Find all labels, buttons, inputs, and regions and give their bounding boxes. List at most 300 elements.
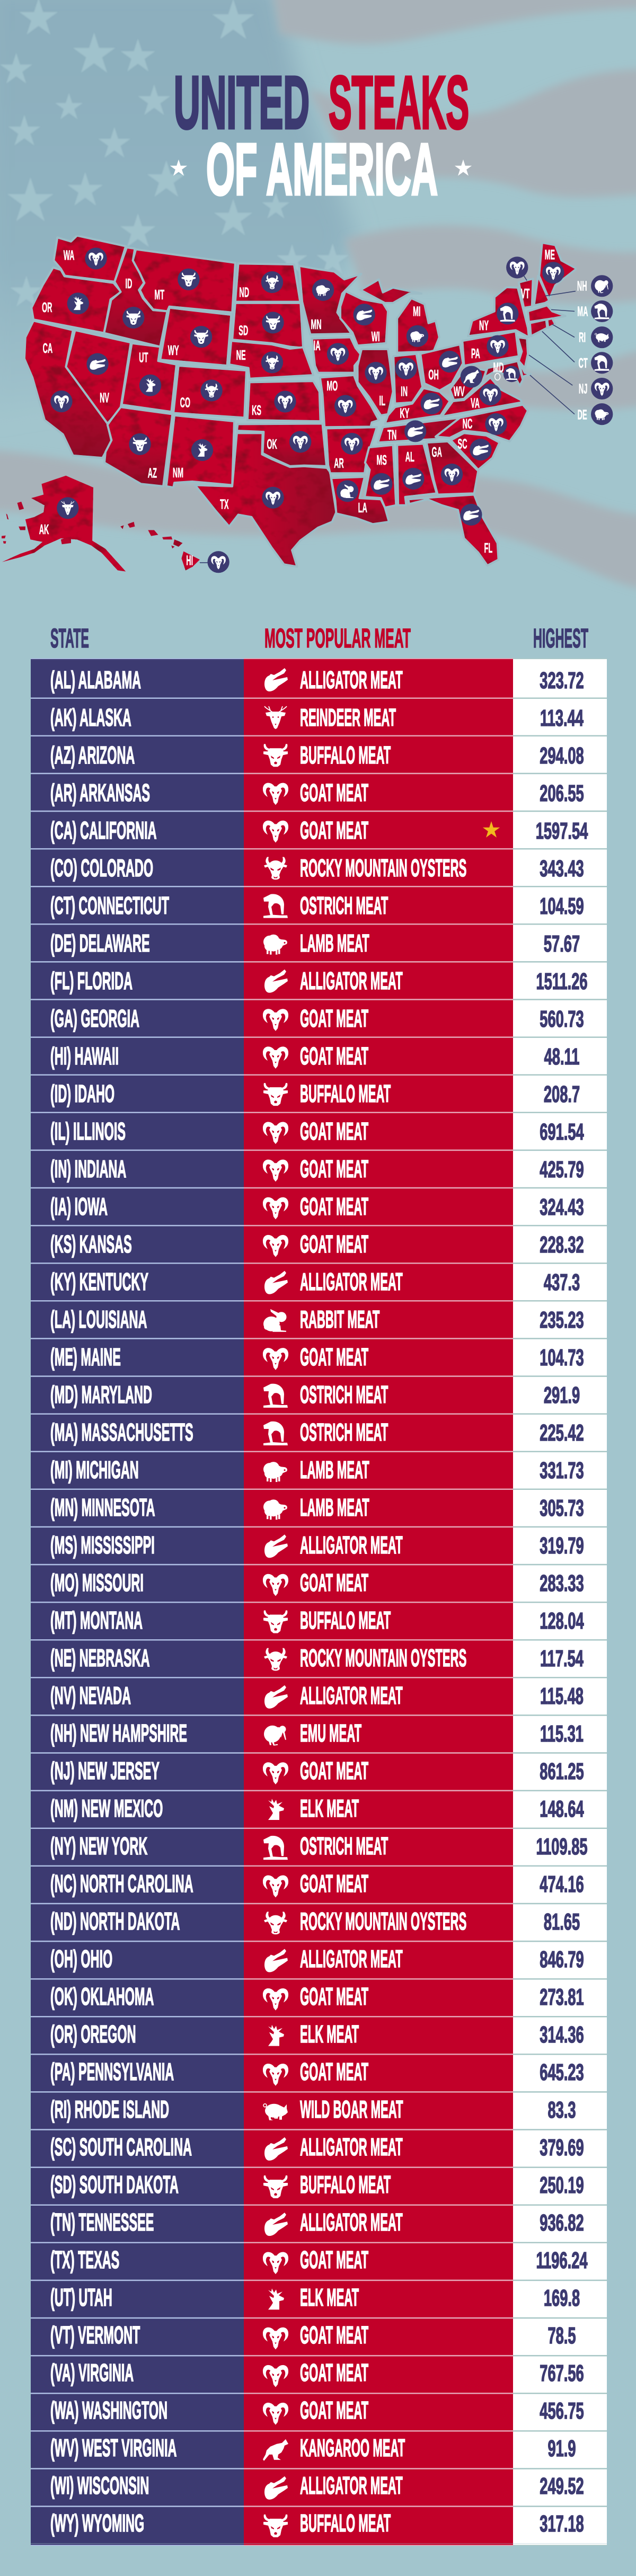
row: South Dakota: [31, 2166, 607, 2205]
icon: AL alligator: [402, 468, 425, 490]
state abbreviations on map: FL: [484, 540, 492, 556]
row: Indiana: 425.79: [540, 1156, 584, 1183]
row: North Carolina: 474.16: [540, 1871, 584, 1897]
state: NY: [468, 287, 529, 337]
Alaska and Hawaii islands: [2, 502, 182, 548]
row: Ohio: [31, 1941, 607, 1978]
row: Kansas: [31, 1225, 607, 1263]
row: Texas: (TX) TEXAS: [50, 2246, 119, 2273]
row: North Carolina: GOAT MEAT: [300, 1870, 368, 1897]
row: New York: (NY) NEW YORK: [50, 1832, 148, 1860]
icon: WI alligator: [354, 304, 375, 325]
state: NM: [166, 415, 234, 487]
icon: NV alligator: [86, 353, 109, 375]
row: Iowa: GOAT MEAT: [300, 1193, 368, 1220]
row: Delaware: 57.67: [544, 930, 580, 957]
row: Wisconsin: [31, 2468, 607, 2506]
state: NC: [436, 405, 528, 441]
row: Florida: (FL) FLORIDA: [50, 967, 132, 994]
state: CA: [24, 321, 111, 458]
eastern states: [299, 243, 577, 565]
state: IL: [358, 349, 393, 415]
icon: TX goat: [262, 487, 284, 509]
row: South Carolina: 379.69: [540, 2134, 584, 2161]
icon: MA ostrich: [591, 300, 613, 322]
state abbreviations on map: AR: [334, 456, 344, 471]
state abbreviations on map: DE: [578, 407, 587, 423]
row: Mississippi: [31, 1526, 607, 1564]
icon: PA goat: [487, 335, 509, 357]
icon: ND rocky mountain oysters: [261, 271, 283, 293]
row: Mississippi: 319.79: [540, 1532, 584, 1559]
row: Michigan: [31, 1451, 607, 1489]
row: Illinois: (IL) ILLINOIS: [50, 1117, 126, 1145]
row: Minnesota: LAMB MEAT: [300, 1494, 369, 1521]
row: New York: OSTRICH MEAT: [300, 1832, 388, 1860]
row: Colorado: 343.43: [540, 855, 584, 882]
row: Louisiana: [31, 1300, 607, 1338]
icon: highest-price star: [483, 821, 500, 838]
row: Ohio: (OH) OHIO: [50, 1945, 112, 1973]
row: Colorado: [31, 848, 607, 886]
icon: KY alligator: [421, 393, 443, 414]
row: Pennsylvania: (PA) PENNSYLVANIA: [50, 2058, 174, 2085]
row: Kentucky: 437.3: [544, 1269, 580, 1295]
row: Hawaii: [31, 1036, 607, 1074]
row: Massachusetts: OSTRICH MEAT: [300, 1418, 388, 1446]
state abbreviations on map: VA: [471, 396, 480, 411]
icon: title stars: [170, 159, 472, 176]
row: Illinois: [31, 1112, 607, 1150]
state abbreviations on map: NH: [577, 279, 587, 294]
state: AR: [326, 427, 377, 473]
row: Nevada: [31, 1677, 607, 1715]
state abbreviations on map: SD: [238, 323, 248, 339]
row: Minnesota: [31, 1489, 607, 1526]
state: MO: [320, 375, 379, 427]
state abbreviations on map: TX: [220, 496, 229, 512]
table bottom edge: [31, 2544, 607, 2546]
row: Delaware: LAMB MEAT: [300, 929, 369, 957]
row: Nevada: 115.48: [540, 1683, 584, 1709]
state: IN: [393, 354, 422, 404]
icon: MO goat: [334, 395, 356, 417]
state: VT: [519, 279, 533, 308]
icon: MD ostrich: [504, 366, 520, 382]
row: New York: 1109.85: [536, 1833, 588, 1860]
row: Oklahoma: (OK) OKLAHOMA: [50, 1983, 154, 2010]
row: New Mexico: (NM) NEW MEXICO: [50, 1795, 163, 1822]
icon: DE lamb: [591, 403, 613, 425]
map of the United States: [2, 236, 613, 573]
row: Michigan: 331.73: [540, 1457, 584, 1484]
row: West Virginia: 91.9: [547, 2435, 576, 2462]
row: Pennsylvania: [31, 2054, 607, 2091]
row: Mississippi: ALLIGATOR MEAT: [300, 1531, 403, 1559]
row: Rhode Island: (RI) RHODE ISLAND: [50, 2095, 169, 2123]
state: KY: [385, 388, 450, 424]
icon: AR goat: [341, 433, 363, 455]
state abbreviations on map: VT: [521, 286, 530, 301]
table top edge: [31, 658, 607, 661]
state abbreviations on map: IN: [401, 384, 408, 399]
state abbreviations on map: ID: [126, 276, 132, 291]
row: South Dakota: 250.19: [540, 2172, 584, 2198]
row: Rhode Island: [31, 2091, 607, 2129]
state: ME: [539, 243, 577, 299]
state abbreviations on map: NC: [463, 416, 472, 432]
icon: FL alligator: [460, 504, 482, 526]
row: Maryland: OSTRICH MEAT: [300, 1381, 388, 1408]
row: New Jersey: 861.25: [540, 1758, 584, 1784]
state: NE: [229, 341, 313, 379]
state: WY: [160, 308, 231, 366]
row: North Carolina: [31, 1866, 607, 1903]
icon: SC alligator: [470, 439, 492, 460]
state: FL: [408, 494, 499, 565]
row: California: 1597.54: [536, 818, 588, 844]
state: NH: [534, 276, 549, 305]
state: MN: [299, 266, 361, 334]
row: Kentucky: [31, 1263, 607, 1300]
row: Maine: 104.73: [540, 1344, 584, 1371]
row: Massachusetts: (MA) MASSACHUSETTS: [50, 1418, 193, 1446]
row: South Carolina: [31, 2129, 607, 2167]
icon: OK goat: [289, 431, 311, 452]
row: Nevada: (NV) NEVADA: [50, 1682, 131, 1709]
row: Rhode Island: WILD BOAR MEAT: [300, 2095, 403, 2123]
row: Arkansas: 206.55: [540, 780, 584, 806]
state: SC: [451, 433, 499, 470]
state: MA: [528, 305, 566, 322]
row: Delaware: (DE) DELAWARE: [50, 929, 150, 957]
row: Washington: 456.75: [540, 2397, 584, 2424]
state abbreviations on map: MO: [326, 378, 338, 394]
row: Indiana: GOAT MEAT: [300, 1155, 368, 1183]
icon: MT buffalo: [178, 269, 200, 290]
row: Montana: BUFFALO MEAT: [300, 1606, 391, 1634]
row: Maryland: (MD) MARYLAND: [50, 1381, 152, 1408]
row: Utah: ELK MEAT: [300, 2284, 359, 2311]
icon: NJ goat: [591, 378, 613, 399]
state abbreviations on map: WA: [64, 248, 75, 263]
row: Virginia: [31, 2355, 607, 2393]
row: Arkansas: (AR) ARKANSAS: [50, 779, 150, 806]
row: Oklahoma: GOAT MEAT: [300, 1983, 368, 2010]
row: North Dakota: 81.65: [544, 1908, 580, 1935]
table headings: [50, 623, 588, 653]
row: Connecticut: 104.59: [540, 893, 584, 919]
state: RI: [547, 318, 555, 328]
row: Missouri: 283.33: [540, 1570, 584, 1596]
state: MI upper peninsula: [360, 279, 421, 303]
row: Texas: GOAT MEAT: [300, 2246, 368, 2273]
state: GA: [427, 441, 478, 494]
row: Virginia: GOAT MEAT: [300, 2359, 368, 2386]
state abbreviations on map: RI: [579, 330, 586, 345]
row: Maine: GOAT MEAT: [300, 1343, 368, 1371]
icon: MN lamb: [312, 279, 334, 301]
row: Florida: [31, 961, 607, 999]
state: HI: [181, 552, 200, 570]
row: Oklahoma: 273.81: [540, 1984, 584, 2010]
row: Maryland: 291.9: [544, 1382, 580, 1408]
row: California: (CA) CALIFORNIA: [50, 816, 157, 844]
state: NV: [66, 330, 131, 424]
row: Delaware: [31, 923, 607, 961]
row: Nebraska: (NE) NEBRASKA: [50, 1644, 150, 1672]
row: New Hampshire: [31, 1715, 607, 1752]
row: Indiana: (IN) INDIANA: [50, 1155, 126, 1183]
row: Wyoming: [31, 2506, 607, 2543]
row: Alabama: 323.72: [540, 667, 584, 694]
state abbreviations on map: [39, 247, 588, 569]
row: Tennessee: [31, 2204, 607, 2242]
icon: LA rabbit: [337, 480, 358, 502]
row: New Hampshire: 115.31: [540, 1720, 584, 1747]
row: Alabama: [31, 660, 607, 698]
state abbreviations on map: OR: [42, 300, 52, 315]
row: Florida: ALLIGATOR MEAT: [300, 967, 403, 994]
state: MI lower peninsula: [397, 298, 439, 353]
state abbreviations on map: MT: [154, 287, 164, 303]
icon: NM elk: [191, 439, 213, 461]
row: Vermont: 78.5: [547, 2322, 576, 2349]
icon: WV kangaroo: [461, 366, 482, 388]
title line: United Steaks: UNITED: [174, 60, 310, 144]
row: Louisiana: (LA) LOUISIANA: [50, 1305, 147, 1333]
row: Nebraska: [31, 1639, 607, 1677]
icon: VT goat: [506, 256, 528, 278]
row: Maine: (ME) MAINE: [50, 1343, 121, 1371]
state: AK: [2, 476, 126, 572]
state: NJ: [518, 337, 528, 368]
row: New Hampshire: EMU MEAT: [300, 1719, 361, 1747]
row: Tennessee: (TN) TENNESSEE: [50, 2208, 154, 2236]
icon: MI lamb: [407, 325, 428, 347]
row: New Hampshire: (NH) NEW HAMPSHIRE: [50, 1719, 187, 1747]
row: Oregon: ELK MEAT: [300, 2020, 359, 2048]
row: Virginia: (VA) VIRGINIA: [50, 2359, 134, 2386]
state abbreviations on map: MD: [493, 360, 504, 376]
row: Massachusetts: 225.42: [540, 1419, 584, 1446]
row: North Dakota: [31, 1903, 607, 1941]
row: Texas: 1196.24: [536, 2247, 588, 2273]
state abbreviations on map: WV: [454, 384, 465, 399]
row: Tennessee: 936.82: [540, 2209, 584, 2236]
state abbreviations on map: NV: [100, 390, 109, 406]
state abbreviations on map: CT: [579, 356, 588, 371]
row: Connecticut: OSTRICH MEAT: [300, 892, 388, 919]
row: Wisconsin: 249.52: [540, 2473, 584, 2499]
state abbreviations on map: AK: [39, 522, 49, 537]
map states: [2, 236, 577, 572]
icon: NE rocky mountain oysters: [261, 351, 283, 373]
state abbreviations on map: NM: [173, 465, 183, 481]
state: MS: [365, 445, 396, 508]
icon: OH alligator: [439, 351, 461, 372]
row: South Dakota: (SD) SOUTH DAKOTA: [50, 2171, 179, 2198]
state abbreviations on map: LA: [358, 500, 367, 516]
row: Washington: GOAT MEAT: [300, 2396, 368, 2424]
row: Utah: 169.8: [544, 2285, 580, 2311]
row: Wisconsin: ALLIGATOR MEAT: [300, 2472, 403, 2499]
row: Arizona: [31, 735, 607, 773]
state: OK: [237, 424, 326, 466]
row: Texas: [31, 2242, 607, 2280]
row: Massachusetts: [31, 1413, 607, 1451]
state abbreviations on map: NE: [236, 348, 246, 363]
row: South Dakota: BUFFALO MEAT: [300, 2171, 391, 2198]
row: Connecticut: [31, 886, 607, 923]
state: TX: [195, 433, 336, 567]
row: Alaska: REINDEER MEAT: [300, 704, 396, 731]
state abbreviations on map: OH: [428, 367, 439, 383]
state abbreviations on map: IL: [379, 393, 385, 409]
text: STEAKS: [329, 60, 469, 144]
row: North Dakota: (ND) NORTH DAKOTA: [50, 1907, 180, 1935]
row: Vermont: (VT) VERMONT: [50, 2321, 140, 2349]
icon: UT elk: [139, 375, 161, 396]
row: Utah: (UT) UTAH: [50, 2284, 112, 2311]
row: Montana: 128.04: [540, 1607, 584, 1634]
row: Idaho: 208.7: [544, 1081, 580, 1107]
row: Wyoming: BUFFALO MEAT: [300, 2509, 391, 2537]
row: Missouri: (MO) MISSOURI: [50, 1569, 144, 1596]
state: OR: [31, 268, 121, 333]
row: North Dakota: ROCKY MOUNTAIN OYSTERS: [300, 1907, 466, 1935]
icon: NH emu: [591, 275, 613, 297]
map markers: [50, 247, 613, 573]
icon: KS goat: [274, 391, 296, 413]
row: Missouri: GOAT MEAT: [300, 1569, 368, 1596]
row: Arkansas: GOAT MEAT: [300, 779, 368, 806]
icon: NC goat: [485, 413, 507, 435]
row: Georgia: GOAT MEAT: [300, 1005, 368, 1032]
state: MD: [484, 361, 523, 386]
row: Maine: [31, 1338, 607, 1375]
row: West Virginia: [31, 2430, 607, 2468]
icon: HI goat: [207, 551, 229, 573]
row: Hawaii: GOAT MEAT: [300, 1042, 368, 1070]
icon: ME goat: [542, 262, 564, 283]
icon: VA goat: [480, 384, 501, 405]
state: WV: [450, 369, 487, 400]
row: Hawaii: 48.11: [544, 1043, 579, 1070]
row: Pennsylvania: 645.23: [540, 2059, 584, 2085]
icon: WA goat: [85, 247, 107, 269]
row: Colorado: (CO) COLORADO: [50, 854, 153, 882]
state abbreviations on map: ND: [239, 285, 249, 300]
icon: IL goat: [365, 362, 387, 384]
state: SD: [232, 303, 303, 348]
row: Utah: [31, 2280, 607, 2317]
row: Pennsylvania: GOAT MEAT: [300, 2058, 368, 2085]
state: TN: [378, 418, 460, 442]
row: West Virginia: (WV) WEST VIRGINIA: [50, 2434, 176, 2462]
row: Alabama: (AL) ALABAMA: [50, 666, 141, 694]
state: WA: [54, 236, 126, 282]
state: AL: [397, 444, 437, 505]
icon: CA goat: [50, 390, 73, 412]
row: Vermont: GOAT MEAT: [300, 2321, 368, 2349]
row: Colorado: ROCKY MOUNTAIN OYSTERS: [300, 854, 466, 882]
icon: MS alligator: [370, 473, 392, 495]
row: Rhode Island: 83.3: [547, 2097, 576, 2123]
icon: RI wild boar: [591, 326, 613, 348]
state abbreviations on map: HI: [186, 553, 193, 569]
row: Michigan: (MI) MICHIGAN: [50, 1456, 139, 1484]
row: Connecticut: (CT) CONNECTICUT: [50, 892, 169, 919]
state abbreviations on map: MA: [577, 304, 588, 319]
state abbreviations on map: AZ: [148, 466, 157, 481]
row: Iowa: (IA) IOWA: [50, 1193, 108, 1220]
icon: AK reindeer: [57, 497, 78, 519]
state: CT: [530, 319, 547, 336]
row: Wyoming: (WY) WYOMING: [50, 2509, 144, 2537]
icon: IN goat: [395, 358, 417, 379]
state: LA: [331, 477, 389, 524]
row: Ohio: ALLIGATOR MEAT: [300, 1945, 403, 1973]
row: Florida: 1511.26: [536, 968, 588, 994]
state: ID: [104, 247, 167, 347]
icon: TN alligator: [404, 420, 426, 442]
row: Oregon: (OR) OREGON: [50, 2020, 136, 2048]
row: Arizona: 294.08: [540, 742, 584, 769]
state: AZ: [104, 407, 172, 486]
state: DE: [519, 361, 531, 379]
row: West Virginia: KANGAROO MEAT: [300, 2434, 405, 2462]
row: Alaska: 113.44: [540, 705, 584, 731]
state: KS: [248, 381, 321, 421]
icon: CO rocky mountain oysters: [200, 380, 223, 402]
icon: IA goat: [327, 343, 349, 365]
row: Illinois: GOAT MEAT: [300, 1117, 368, 1145]
row: Nebraska: 117.54: [540, 1645, 584, 1672]
icon: ID buffalo: [122, 307, 144, 328]
state: UT: [122, 343, 176, 412]
row: Oregon: 314.36: [540, 2021, 584, 2048]
row: Michigan: LAMB MEAT: [300, 1456, 369, 1484]
row: New Jersey: GOAT MEAT: [300, 1757, 368, 1784]
state abbreviations on map: AL: [405, 449, 414, 465]
state: ND: [235, 263, 300, 302]
row: Montana: (MT) MONTANA: [50, 1606, 143, 1634]
icon: OR elk: [67, 292, 89, 314]
row: Minnesota: (MN) MINNESOTA: [50, 1494, 155, 1521]
row: Idaho: (ID) IDAHO: [50, 1080, 114, 1107]
row: New York: [31, 1828, 607, 1866]
state: PA: [462, 331, 519, 366]
table headings: MOST POPULAR MEAT: [264, 623, 411, 653]
row: Washington: (WA) WASHINGTON: [50, 2396, 167, 2424]
row: Idaho: BUFFALO MEAT: [300, 1080, 391, 1107]
icon: WY buffalo: [190, 326, 212, 348]
row: Oregon: [31, 2016, 607, 2054]
row: Louisiana: 235.23: [540, 1307, 584, 1333]
row: Kansas: (KS) KANSAS: [50, 1230, 132, 1258]
state abbreviations on map: GA: [432, 445, 442, 460]
row: Hawaii: (HI) HAWAII: [50, 1042, 119, 1070]
state abbreviations on map: SC: [457, 437, 467, 452]
row: Alabama: ALLIGATOR MEAT: [300, 666, 403, 694]
icon: GA goat: [441, 464, 463, 485]
row: Iowa: 324.43: [540, 1194, 584, 1220]
row: Illinois: 691.54: [540, 1118, 584, 1145]
row: Kentucky: ALLIGATOR MEAT: [300, 1268, 403, 1295]
state: VA: [441, 378, 522, 416]
row: Kansas: 228.32: [540, 1231, 584, 1258]
